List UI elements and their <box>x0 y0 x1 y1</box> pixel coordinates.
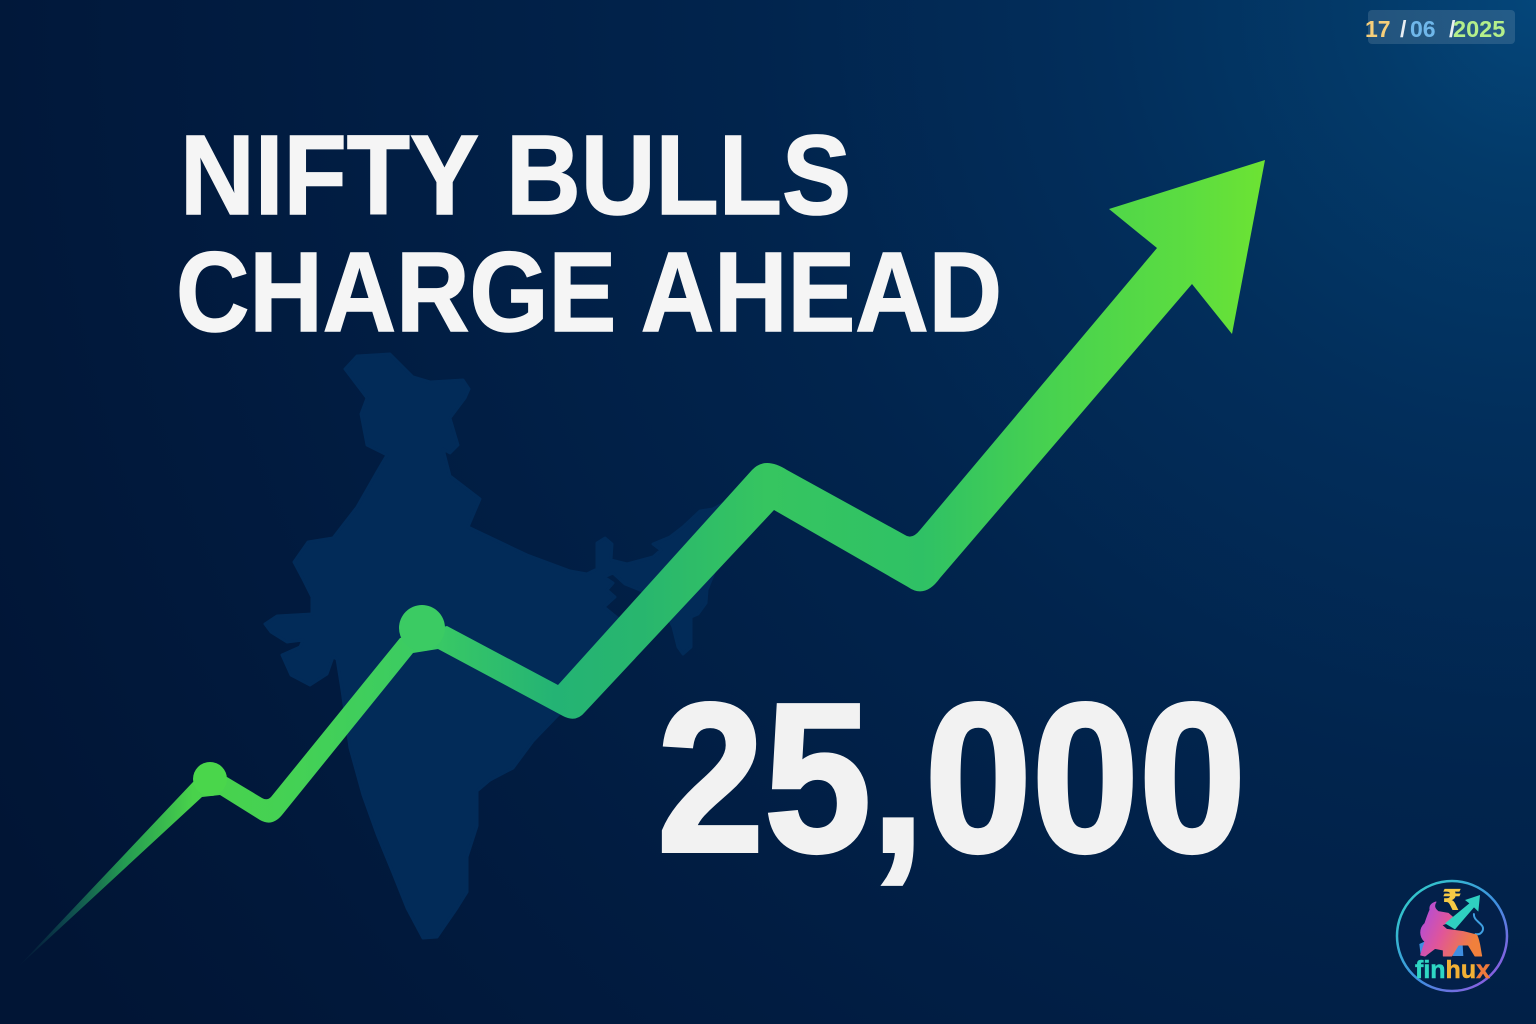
rupee symbol: ₹ <box>1442 885 1462 917</box>
month: 06 <box>1410 16 1436 42</box>
bull legs <box>1419 941 1463 956</box>
growth arrow <box>1445 895 1480 929</box>
title line 2: CHARGE AHEAD <box>176 229 1002 355</box>
bull tail <box>1474 913 1483 934</box>
arrow body and head <box>18 160 1265 967</box>
title <box>176 112 1002 355</box>
date badge <box>1365 10 1515 44</box>
chart node: first point <box>193 762 227 796</box>
logo wordmark: finhux <box>1415 956 1490 984</box>
year: 2025 <box>1453 16 1505 42</box>
chart node: second point <box>399 605 445 651</box>
bull icon <box>1419 895 1483 956</box>
bull body <box>1421 902 1482 956</box>
finhux logo <box>1397 881 1507 991</box>
logo ring <box>1397 881 1507 991</box>
day: 17 <box>1365 16 1391 42</box>
separator: / <box>1449 16 1456 42</box>
rising green arrow line chart <box>18 160 1265 967</box>
separator: / <box>1400 16 1407 42</box>
badge background <box>1368 10 1515 44</box>
index level number: 25,000 <box>657 659 1246 896</box>
title line 1: NIFTY BULLS <box>180 112 851 238</box>
India map silhouette <box>265 354 730 938</box>
